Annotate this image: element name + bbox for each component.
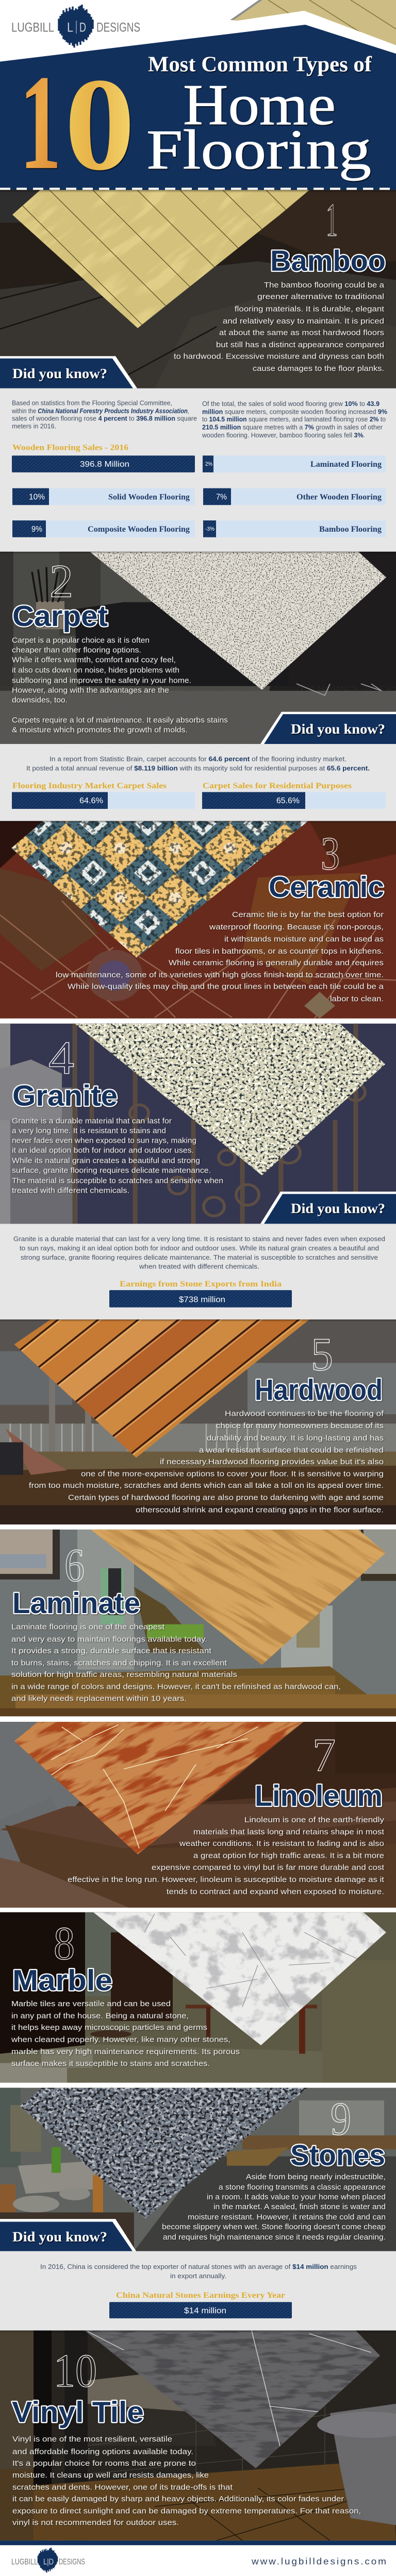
ceramic text block xyxy=(56,911,384,1003)
carpet sample xyxy=(88,552,392,692)
carpet facts text: In a report from Statistic Brain, carpet accounts for 64.6 percent of the flooring industry market. xyxy=(50,755,346,762)
carpet text block xyxy=(12,636,228,734)
laminate text block: Laminate flooring is one of the cheapest xyxy=(11,1623,165,1632)
granite facts text: when treated with different chemicals. xyxy=(139,1263,259,1270)
linoleum room background xyxy=(0,1722,396,1908)
carpet text block: subflooring and improves the safety in your home. xyxy=(12,676,191,685)
hardwood text block: Certain types of hardwood flooring are also prone to darkening with age and some xyxy=(68,1494,384,1502)
hardwood text block xyxy=(29,1410,384,1514)
laminate text block: in a wide range of colors and designs. However, it can't be refinished as hardwood can, xyxy=(11,1683,341,1691)
marble text block: marble has very high maintenance requirements. Its porous xyxy=(11,2048,240,2056)
panel: header xyxy=(0,0,396,198)
vinyl text block: and affordable flooring options available today. xyxy=(12,2448,193,2456)
granite text block: Granite is a durable material that can last for xyxy=(12,1117,172,1125)
number 2: 2 xyxy=(50,555,73,607)
did you know tab xyxy=(260,1192,396,1224)
bar: bamboo flooring: -3% xyxy=(205,527,214,532)
ceramic text block: waterproof flooring. Because it's non-porous, xyxy=(209,923,384,931)
dashed divider xyxy=(0,188,396,190)
granite text block: a very long time. It is resistant to stains and xyxy=(12,1127,166,1135)
bar: other wooden flooring: Other Wooden Flooring xyxy=(296,492,382,501)
bamboo flooring sample xyxy=(12,190,309,328)
panel: 9 stones xyxy=(0,2088,396,2251)
carpet text block: cheaper than other flooring options. xyxy=(12,646,141,654)
heading: Carpet: Carpet xyxy=(12,600,108,632)
bar: 396.8 million: 396.8 Million xyxy=(80,460,129,469)
vinyl room background xyxy=(0,2330,396,2540)
ceramic text block: While low-quality tiles may chip and the grout lines in between each tile could be a xyxy=(68,982,384,991)
stones text block: moisture resistant. However, it retains the cold and can xyxy=(188,2213,386,2222)
bamboo text block: at about the same as most hardwood floors xyxy=(219,329,384,337)
ceramic text block: low maintenance, some of its varieties with high gloss finish tend to scratch over time. xyxy=(56,971,384,979)
title: 10 xyxy=(20,47,135,198)
vinyl text block: vinyl is not recommended for outdoor uses. xyxy=(12,2519,179,2527)
panel: 8 marble xyxy=(0,1912,396,2082)
ceramic text block: floor tiles in bathrooms, or as counter tops in kitchens. xyxy=(175,947,384,956)
vinyl text block: it can be easily damaged by sharp and heavy objects. Additionally, its color fades under xyxy=(12,2495,344,2503)
linoleum sample xyxy=(14,1722,303,1855)
did you know tab xyxy=(0,2219,136,2251)
facts right column: to 104.5 million square meters, and laminated flooring rose 2% to xyxy=(202,416,386,423)
linoleum text block: materials that lasts long and retains shape in most xyxy=(193,1828,385,1836)
bar: 64.6%: 64.6% xyxy=(79,796,103,805)
facts right column xyxy=(202,400,387,439)
marble text block: in any part of the house. Being a natural stone, xyxy=(11,2012,189,2020)
stones text block: a stone flooring transmits a classic appearance xyxy=(219,2183,386,2192)
number 9: 9 xyxy=(331,2093,351,2145)
bar: composite wooden flooring xyxy=(12,520,195,537)
carpet text block: Carpets require a lot of maintenance. It easily absorbs stains xyxy=(12,716,228,724)
marble text block: when cleaned properly. However, like many other stones, xyxy=(11,2036,230,2044)
panel: 6 laminate xyxy=(0,1529,396,1717)
bamboo text block: flooring materials. It is durable, elegant xyxy=(235,305,385,313)
heading: Linoleum: Linoleum xyxy=(255,1780,383,1812)
facts right column: wooden flooring. However, bamboo flooring sales fell 3%. xyxy=(202,431,365,439)
facts left column: Based on statistics from the Flooring Special Committee, xyxy=(12,399,172,406)
carpet text block: However, along with the advantages are the xyxy=(12,686,169,694)
marble text block: Marble tiles are versatile and can be used xyxy=(11,1999,171,2008)
laminate room background xyxy=(0,1530,396,1716)
vinyl text block xyxy=(12,2435,361,2527)
panel: wooden flooring facts xyxy=(0,388,396,552)
title: 10: 0 xyxy=(64,50,135,198)
ceramic text block: it withstands moisture and can be used as xyxy=(224,935,384,943)
laminate text block: to burns, stains, scratches and chipping. It is an excellent xyxy=(11,1659,227,1667)
bar: composite wooden flooring: Composite Wooden Flooring xyxy=(88,524,190,534)
heading: Ceramic: Ceramic xyxy=(269,871,384,904)
header navy roof panel xyxy=(0,25,396,190)
bar: other wooden flooring xyxy=(203,488,386,505)
stones text block: Aside from being nearly indestructible, xyxy=(246,2173,386,2181)
hardwood text block: choice for many homeowners because of its xyxy=(216,1422,384,1430)
title: 10: 1 xyxy=(20,47,61,198)
did you know tab: Did you know? xyxy=(291,1201,385,1216)
marble sample xyxy=(90,1912,389,2047)
hardwood text block: durability and beauty. It is long-lasting and has xyxy=(207,1434,384,1443)
carpet text block: & moisture which promotes the growth of molds. xyxy=(12,726,188,734)
bar: other wooden flooring: 7% xyxy=(216,493,227,501)
facts right column: 210.5 million square metres with a 7% growth in sales of other xyxy=(202,423,383,431)
carpet facts text xyxy=(26,755,370,772)
bar: 65.6%: 65.6% xyxy=(276,796,300,805)
chart title: market sales: Flooring Industry Market Carpet Sales xyxy=(12,781,167,790)
bamboo text block: greener alternative to traditional xyxy=(257,293,384,301)
vinyl text block: It's a popular choice for rooms that are prone to xyxy=(12,2460,196,2468)
bar: $738 million: $738 million xyxy=(179,1295,225,1304)
bamboo text block: The bamboo flooring could be a xyxy=(264,281,384,290)
panel: 7 linoleum xyxy=(0,1722,396,1908)
did you know tab: Did you know? xyxy=(291,721,385,737)
chart title: China Natural Stones Earnings Every Year xyxy=(116,2291,285,2300)
did you know tab: Did you know? xyxy=(12,2229,107,2245)
heading: Stones: Stones xyxy=(290,2139,385,2172)
panel: 1 bamboo: 1 xyxy=(326,194,338,246)
carpet text block: While it offers warmth, comfort and cozy feel, xyxy=(12,656,176,664)
ceramic text block: While ceramic flooring is generally durable and requires xyxy=(169,959,384,967)
granite facts text: strong surface, granite flooring requires delicate maintenance. The material is susceptible to scratches and sensitive xyxy=(21,1254,378,1261)
bar: $738 million xyxy=(109,1290,292,1308)
vinyl tile sample xyxy=(82,2330,384,2470)
number 10: 10 xyxy=(54,2345,97,2397)
title: Home: Home xyxy=(183,73,336,137)
marble room background xyxy=(0,1912,396,2082)
panel: stones facts xyxy=(0,2251,396,2330)
hardwood text block: a wear resistant surface that could be refinished xyxy=(199,1446,384,1454)
chart title: Wooden Flooring Sales - 2016 xyxy=(12,443,128,452)
carpet text block: it also cuts down on noise, hides problems with xyxy=(12,666,179,674)
bamboo room background xyxy=(0,190,396,388)
linoleum text block: a great option for high traffic areas. It is a bit more xyxy=(193,1852,384,1860)
stones text block: and requires high maintenance since it needs regular cleaning. xyxy=(163,2233,386,2242)
bar: 65.6% xyxy=(202,792,386,809)
heading: Granite: Granite xyxy=(12,1079,118,1112)
vinyl text block: scratches and dents. However, one of its trade-offs is that xyxy=(12,2483,233,2492)
hardwood room background xyxy=(0,1319,396,1524)
ceramic text block: labor to clean. xyxy=(330,995,384,1003)
granite facts text: to sun rays, making it an ideal option both for indoor and outdoor uses. While its natural grain creates a beautiful and xyxy=(20,1245,379,1252)
number 4: 4 xyxy=(48,1032,74,1084)
laminate text block xyxy=(11,1623,341,1703)
marble text block: it helps keep away microscopic particles and germs xyxy=(11,2024,207,2032)
hardwood text block: Hardwood continues to be the flooring of xyxy=(225,1410,384,1418)
bar: solid wooden flooring: Solid Wooden Flooring xyxy=(108,492,190,501)
bar: solid wooden flooring xyxy=(12,488,195,505)
panel: 4 granite xyxy=(0,1024,396,1224)
hardwood text block: one of the more-expensive options to cover your floor. It is sensitive to warping xyxy=(81,1470,384,1478)
did you know tab xyxy=(0,356,137,388)
bamboo text block: and relatively easy to maintain. It is priced xyxy=(223,317,384,326)
hardwood text block: from too much moisture, scratches and dents which can all take a toll on its appeal over time. xyxy=(29,1482,384,1490)
marble text block xyxy=(11,1999,240,2068)
stones sample xyxy=(15,2088,312,2221)
bar: 64.6% xyxy=(12,792,195,809)
bar: $14 million xyxy=(109,2302,292,2318)
panel: 1 bamboo xyxy=(0,190,396,388)
heading: Marble: Marble xyxy=(12,1964,112,1996)
granite background xyxy=(0,1024,396,1224)
bar: bamboo flooring: Bamboo Flooring xyxy=(319,524,382,534)
carpet text block: Carpet is a popular choice as it is often xyxy=(12,636,150,645)
laminate text block: and very easy to maintain floorings available today. xyxy=(11,1635,207,1643)
linoleum text block: expensive compared to vinyl but is far more durable and cost xyxy=(152,1863,385,1872)
logo: Lugbill Designs: L xyxy=(67,20,73,35)
heading: Vinyl Tile: Vinyl Tile xyxy=(12,2396,144,2428)
chart title: residential: Carpet Sales for Residential Purposes xyxy=(203,781,352,790)
bamboo text block: but still has a distinct appearance compared xyxy=(216,341,384,349)
bar: $14 million: $14 million xyxy=(184,2307,226,2315)
heading: Bamboo: Bamboo xyxy=(270,244,386,277)
bamboo text block xyxy=(174,281,385,373)
footer logo: L|D xyxy=(43,2557,54,2566)
carpet room background xyxy=(0,552,396,744)
number 3: 3 xyxy=(321,827,340,879)
granite text block: The material is susceptible to scratches and sensitive when xyxy=(12,1177,223,1185)
did you know tab: Did you know? xyxy=(12,366,107,381)
did you know tab xyxy=(260,712,396,744)
stones facts text: in export annually. xyxy=(170,2273,226,2280)
laminate text block: and likely needs replacement within 10 years. xyxy=(11,1694,187,1703)
granite text block: treated with different chemicals. xyxy=(12,1187,129,1195)
logo: Lugbill Designs xyxy=(11,5,140,47)
number 6: 6 xyxy=(64,1539,85,1591)
linoleum text block: weather conditions. It is resistant to fading and is also xyxy=(179,1840,384,1848)
granite text block xyxy=(12,1117,223,1195)
ceramic tile sample xyxy=(10,821,315,961)
bar: composite wooden flooring: 9% xyxy=(31,525,42,534)
panel: 3 ceramic xyxy=(0,821,396,1019)
vinyl text block: exposure to direct sunlight and can be damaged by extreme temperatures. For that reason, xyxy=(12,2507,361,2515)
ceramic room background xyxy=(0,821,396,1019)
granite text block: surface, granite flooring requires delicate maintenance. xyxy=(12,1166,211,1175)
granite text block: never fades even when exposed to sun rays, making xyxy=(12,1137,196,1145)
stones text block: in a room. It adds value to your home when placed xyxy=(207,2193,386,2201)
facts left column: sales of wooden flooring rose 4 percent to 396.8 million square xyxy=(12,415,197,422)
header wood backdrop xyxy=(230,0,396,82)
stones kitchen background xyxy=(0,2088,396,2251)
panel: carpet facts xyxy=(0,744,396,821)
marble text block: surface makes it susceptible to stains and scratches. xyxy=(11,2059,210,2068)
stones facts text: In 2016, China is considered the top exporter of natural stones with an average of $14 million earnings xyxy=(40,2263,357,2270)
heading: Laminate: Laminate xyxy=(12,1587,140,1619)
panel: 10 vinyl tile xyxy=(0,2330,396,2540)
carpet text block: downsides, too. xyxy=(12,696,68,704)
logo: Lugbill Designs: D xyxy=(79,20,86,35)
logo: Lugbill Designs: DESIGNS xyxy=(96,20,140,35)
linoleum text block: tends to contract and expand when exposed to moisture. xyxy=(167,1888,384,1896)
footer navy band xyxy=(0,2540,396,2545)
bar: laminated flooring: 2% xyxy=(205,462,212,467)
hardwood plank sample xyxy=(14,1319,309,1458)
granite facts text: Granite is a durable material that can last for a very long time. It is resistant to stains and never fades even when exposed xyxy=(13,1235,385,1243)
vinyl text block: moisture. It cleans up well and resists damages, like xyxy=(12,2471,209,2480)
footer logo xyxy=(11,2548,85,2573)
facts left column: meters in 2016. xyxy=(12,422,56,430)
bamboo text block: to hardwood. Excessive moisture and dryness can both xyxy=(174,352,384,361)
chart title: Earnings from Stone Exports from India xyxy=(120,1279,282,1289)
title: Most Common Types of: Most Common Types of xyxy=(148,52,372,76)
title: Flooring: Flooring xyxy=(146,118,371,181)
facts left column xyxy=(11,399,197,430)
facts right column: million square meters, composite wooden flooring increased 9% xyxy=(202,408,387,415)
header roof band xyxy=(0,11,396,62)
stones facts text xyxy=(40,2263,357,2280)
facts right column: Of the total, the sales of solid wood flooring grew 10% to 43.9 xyxy=(202,400,380,408)
laminate text block: It provides a strong, durable surface that is resistant xyxy=(11,1647,212,1655)
panel: 2 carpet xyxy=(0,552,396,744)
footer logo: DESIGNS xyxy=(59,2557,85,2566)
hardwood text block: if necessary.Hardwood flooring provides value but it's also xyxy=(160,1458,384,1466)
bar: bamboo flooring xyxy=(203,520,386,537)
logo: Lugbill Designs: LUGBILL xyxy=(11,20,54,35)
footer logo: LUGBILL xyxy=(11,2557,38,2566)
stones text block: become slippery when wet. Stone flooring doesn't come cheap xyxy=(162,2223,386,2231)
granite text block: While its natural grain creates a beautiful and strong xyxy=(12,1157,200,1165)
stones text block: in the market. A sealed, finish stone is water and xyxy=(213,2203,386,2211)
stones text block xyxy=(162,2173,386,2242)
number 5: 5 xyxy=(311,1328,333,1380)
number 8: 8 xyxy=(54,1918,75,1969)
panel: 5 hardwood xyxy=(0,1319,396,1524)
bar: 396.8 million xyxy=(12,455,195,472)
laminate sample xyxy=(91,1530,386,1665)
bar: laminated flooring: Laminated Flooring xyxy=(310,460,382,469)
facts left column: within the China National Forestry Products Industry Association, xyxy=(11,407,189,415)
linoleum text block: Linoleum is one of the earth-friendly xyxy=(244,1816,384,1824)
hardwood text block: otherscould shrink and expand creating gaps in the floor surface. xyxy=(136,1506,384,1514)
linoleum text block: effective in the long run. However, linoleum is susceptible to moisture damage as it xyxy=(68,1875,385,1884)
carpet facts text: It posted a total annual revenue of $8.119 billion with its majority sold for residential purposes at 65.6 percent. xyxy=(26,765,370,772)
panel: granite facts xyxy=(0,1224,396,1319)
laminate text block: solution for high traffic areas, resembling natural materials xyxy=(11,1671,237,1679)
bar: laminated flooring xyxy=(203,455,386,472)
bar: solid wooden flooring: 10% xyxy=(29,493,45,501)
granite text block: it an ideal option both for indoor and outdoor uses. xyxy=(12,1146,194,1155)
granite sample xyxy=(72,1024,387,1178)
granite facts text xyxy=(13,1235,385,1270)
ceramic text block: Ceramic tile is by far the best option for xyxy=(232,911,384,919)
linoleum text block xyxy=(68,1816,385,1896)
vinyl text block: Vinyl is one of the most resilient, versatile xyxy=(12,2435,172,2444)
panel: footer xyxy=(0,2540,396,2573)
bamboo text block: cause damages to the floor planks. xyxy=(253,365,384,373)
number 7: 7 xyxy=(312,1730,336,1781)
website url: www.lugbilldesigns.com xyxy=(251,2556,386,2566)
